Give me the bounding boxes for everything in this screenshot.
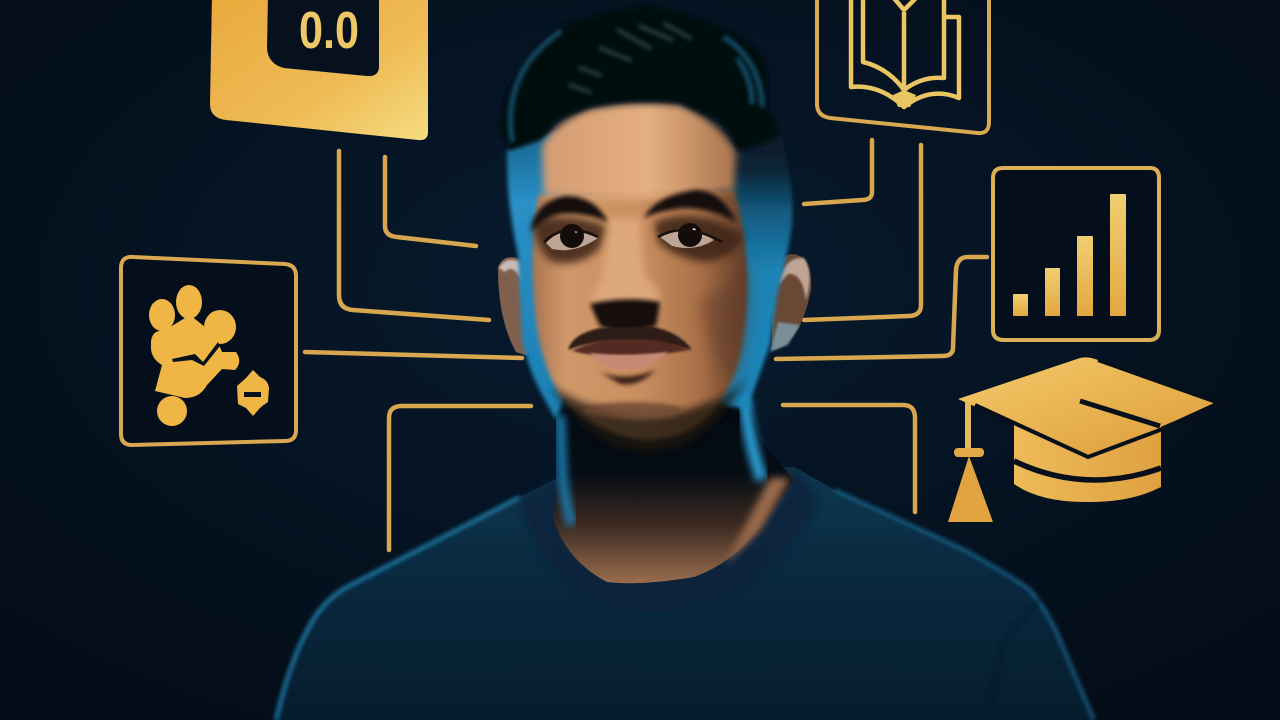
neck bbox=[553, 400, 794, 583]
left eye bbox=[544, 224, 598, 250]
collar band bbox=[520, 467, 818, 613]
hair bbox=[500, 5, 780, 150]
nose bbox=[592, 218, 660, 305]
beard bbox=[583, 402, 683, 418]
jaw shadow bbox=[552, 375, 748, 452]
icon: graduation cap bbox=[948, 357, 1219, 522]
eye sockets bbox=[533, 217, 606, 263]
blue side lighting: left bbox=[507, 130, 600, 420]
connector lines bbox=[305, 140, 987, 550]
icon: paw cluster in frame bbox=[121, 257, 296, 445]
portrait bbox=[276, 5, 1094, 720]
blue side lighting: right bbox=[700, 100, 792, 410]
right cheek shadow bbox=[700, 260, 748, 385]
lips bbox=[572, 339, 690, 356]
hair rim light bbox=[510, 32, 762, 140]
eyebrows bbox=[531, 196, 608, 232]
icon: open book in frame bbox=[817, 0, 989, 133]
icon: gold card with 0.0 display bbox=[210, 0, 428, 140]
display digits: 0.0 bbox=[299, 2, 359, 60]
face bbox=[531, 103, 748, 452]
mustache bbox=[568, 326, 692, 350]
hair highlights bbox=[570, 24, 690, 92]
right eye bbox=[658, 223, 722, 248]
shirt bbox=[276, 467, 1094, 720]
icon: bar chart in frame bbox=[993, 168, 1159, 340]
ears bbox=[498, 254, 811, 356]
